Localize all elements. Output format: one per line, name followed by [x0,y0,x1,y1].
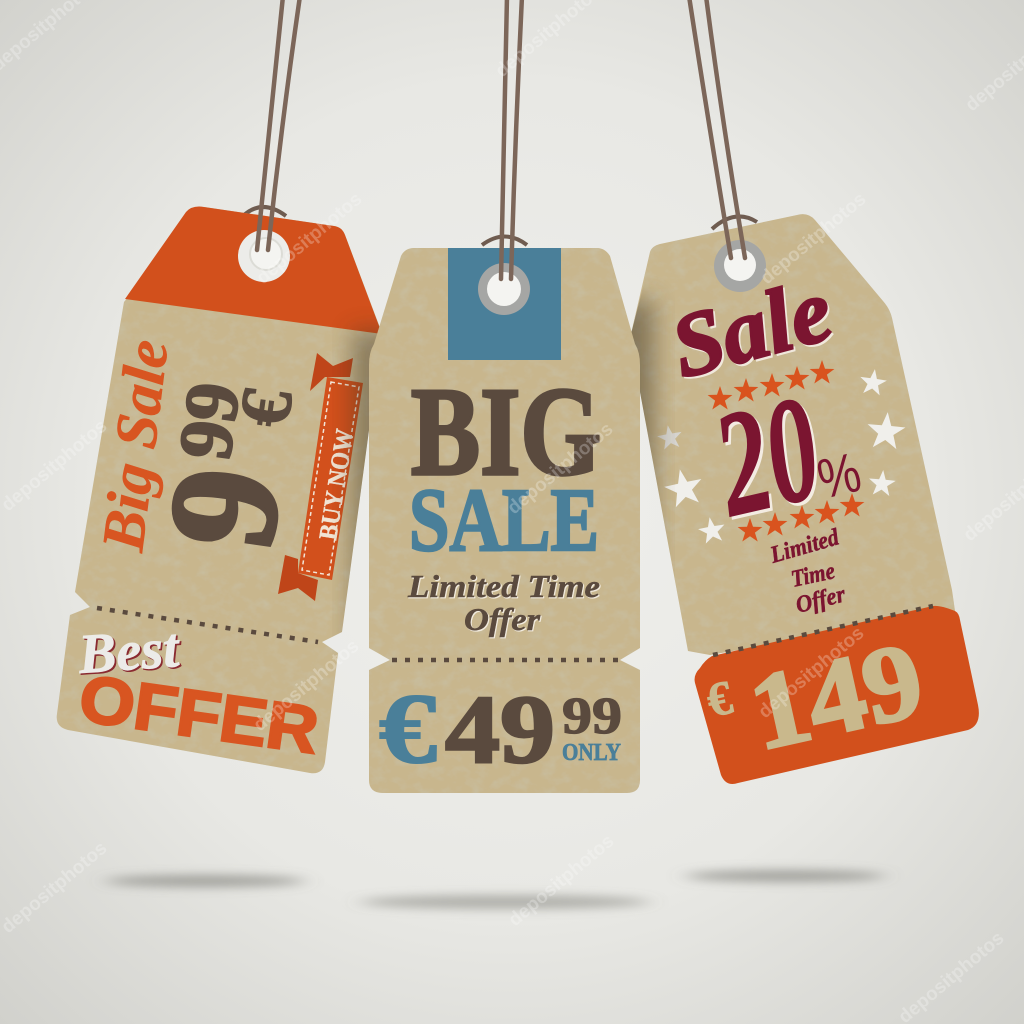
left price tag [57,0,382,773]
tear line dots left [97,608,318,642]
watermarks: depositphotos [505,831,618,931]
text: best: Best [77,618,184,687]
text: best: Best [76,617,182,686]
tag body left [57,207,382,773]
floor shadows [105,870,885,909]
eyelet [714,240,766,292]
text: 20: 20 [702,367,837,551]
eyelet [238,230,290,282]
watermarks: depositphotos [504,419,617,519]
watermarks: depositphotos [0,838,111,938]
text: offer: Offer [465,602,542,638]
text: sale: Sale [662,260,842,397]
watermarks: depositphotos [0,416,111,516]
ribbon: buy now [278,353,363,601]
strap strings centre [501,0,522,279]
text: percent: % [812,440,867,511]
price: nine: 9 [135,458,314,558]
tear line dots centre [392,658,620,662]
text: euro: € [702,671,737,728]
tag body centre [369,248,640,793]
strap strings right [689,0,745,258]
tag body right [630,214,955,655]
string loop right [712,216,757,229]
text: limited time: Limited Time [408,569,601,605]
watermarks: depositphotos [253,189,366,289]
orange header [125,207,382,334]
text: sale: Sale [664,262,844,399]
orange price panel [695,606,979,784]
ribbon: buy now: BUY NOW [313,427,359,542]
text: offer: Offer [464,601,541,637]
text: only: ONLY [562,740,621,766]
watermarks: depositphotos [757,189,870,289]
string loop left [243,207,286,216]
price: 49: 49 [445,676,555,784]
text: big sale: Big Sale [89,336,181,556]
price: cents: 99 [163,377,256,464]
text: 20: 20 [700,364,834,548]
right price tag [630,0,979,784]
orange stars [708,360,864,542]
tear line dots right [713,606,933,655]
watermarks: depositphotos [755,623,868,723]
watermarks: depositphotos [250,636,363,736]
text: limited time: Limited Time [407,568,600,604]
blue header [448,248,561,360]
price: euro: € [379,673,437,784]
price: 99: 99 [562,688,622,745]
cast shadows from centre tag [352,300,654,650]
text: offer: OFFER [75,661,323,767]
text: limited: Limited [767,524,843,569]
white stars [656,367,907,544]
text: sale: SALE [409,471,599,570]
text: big: BIG [411,363,601,502]
text: time: Time [789,558,838,593]
price: euro sign: € [224,384,308,431]
text: 20 [700,364,837,551]
centre price tag [369,0,640,793]
text: 149: 149 [739,620,933,773]
eyelet [478,263,530,315]
string loop centre [482,236,527,245]
strap strings left [257,0,300,250]
text: offer: Offer [793,581,849,619]
